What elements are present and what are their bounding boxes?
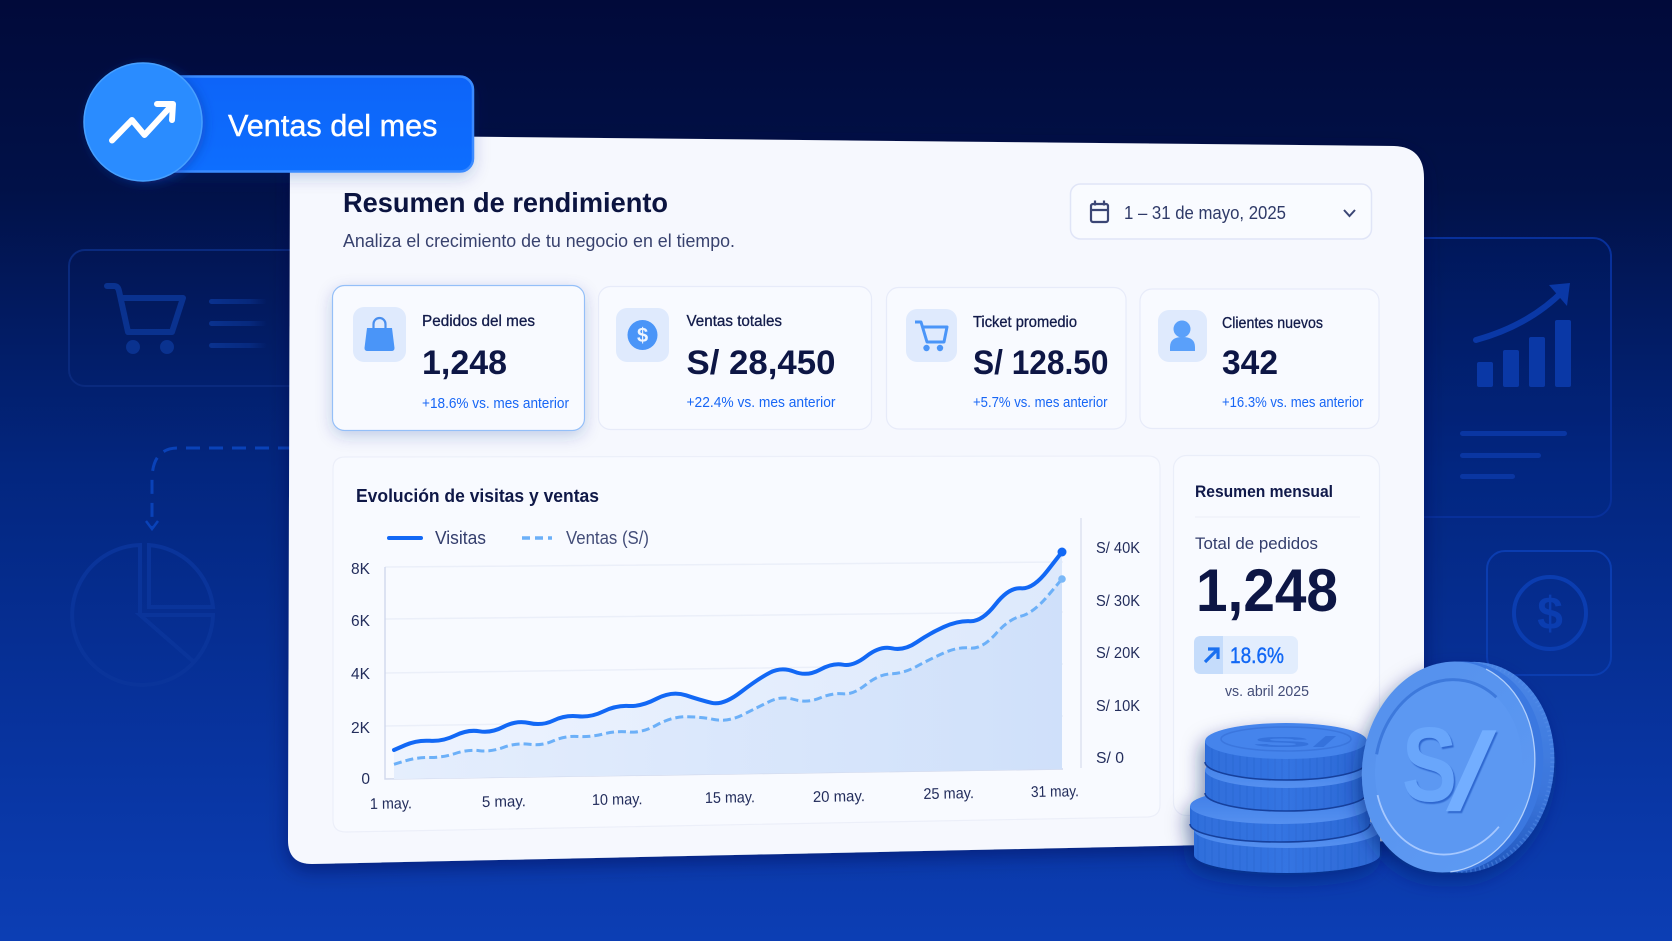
legend: Visitas [435,528,486,548]
x axis labels: 31 may. [1031,783,1079,801]
KPI card: clientes nuevos [1140,289,1379,428]
y axis left labels: 2K [351,720,371,737]
icon: shopping bag [353,307,406,362]
x axis labels [370,783,1079,813]
arrow: dashed connector to pie chart [146,448,292,529]
growth badge: 18.6% [1230,643,1284,668]
series: visitas line [394,548,1066,750]
y axis right labels: S/ 40K [1096,540,1141,557]
badge: ventas del mes [84,63,473,181]
large coin [1345,646,1571,888]
y axis left labels: 0 [361,771,370,788]
x axis labels: 1 may. [370,795,412,813]
legend: Ventas (S/) [566,528,649,548]
coin 3 [1190,788,1370,842]
coin symbol [1402,706,1497,833]
KPI card: pedidos del mes: 1,248 [422,344,507,382]
heading: Resumen de rendimiento [343,187,668,218]
background panel: shopping cart [69,250,369,386]
KPI card: ticket promedio: Ticket promedio [973,314,1077,331]
y axis left labels: 8K [351,561,371,578]
y axis left labels: 4K [351,666,371,683]
coin 1: S/ [1252,733,1338,750]
KPI card: ticket promedio: S/ 128.50 [973,344,1108,382]
icon: dollar coin [616,308,669,362]
y axis right labels [1096,540,1141,767]
icon: cart [906,309,957,362]
series: ventas dashed line [394,575,1066,764]
KPI card: ventas totales [598,286,872,430]
growth badge [1194,636,1298,674]
panel: resumen mensual: vs. abril 2025 [1225,683,1309,700]
y axis right labels: S/ 0 [1096,750,1124,767]
icon: dollar coin: $ [637,325,648,347]
date selector [1070,184,1372,239]
y axis left labels: 6K [351,613,371,630]
KPI card: pedidos del mes: +18.6% vs. mes anterior [422,396,569,412]
x axis labels: 5 may. [482,793,526,811]
text lines [1460,431,1567,479]
KPI card: clientes nuevos: Clientes nuevos [1222,315,1323,332]
KPI card: ventas totales: Ventas totales [686,313,782,330]
grid and axes [385,518,1081,779]
subheading: Analiza el crecimiento de tu negocio en el tiempo. [343,231,735,251]
coin stack [1190,723,1380,873]
coin 2 [1205,752,1367,811]
icon: trend arrow in circle [84,63,202,181]
chart title: Evolución de visitas y ventas [356,486,599,506]
area under the curve [394,552,1062,779]
coin face [1345,648,1552,886]
x axis labels: 10 may. [592,791,643,809]
y axis right labels: S/ 30K [1096,593,1141,610]
panel: resumen mensual [1174,456,1380,816]
panel: resumen mensual: 1,248 [1196,557,1338,624]
KPI card: ticket promedio: +5.7% vs. mes anterior [973,395,1108,411]
y axis right labels: S/ 20K [1096,645,1141,662]
KPI card: ventas totales: S/ 28,450 [686,344,836,382]
icon: growth arrow [1476,283,1570,340]
date selector: 1 – 31 de mayo, 2025 [1124,203,1286,223]
x axis labels: 20 may. [813,788,865,806]
coin 1 [1205,723,1367,780]
x axis labels: 15 may. [705,789,755,807]
KPI card: ventas totales: +22.4% vs. mes anterior [686,395,836,411]
icon: person [1158,310,1207,362]
KPI card: pedidos del mes [332,286,584,430]
background panel: dollar: $ [1537,587,1563,639]
KPI card: ticket promedio [886,288,1126,429]
KPI card: clientes nuevos: 342 [1222,344,1278,382]
background panel: dollar [1487,551,1611,675]
icon: calendar [1091,200,1108,222]
coin symbol: / [1446,710,1497,833]
legend [389,528,649,548]
y axis left labels [351,561,371,788]
KPI card: pedidos del mes: Pedidos del mes [422,313,535,330]
KPI card: clientes nuevos: +16.3% vs. mes anterior [1222,395,1364,411]
icon: chevron [1344,210,1355,216]
x axis labels: 25 may. [923,785,974,803]
panel: main dashboard card [288,135,1424,864]
background panel: growth chart [1380,238,1611,517]
coin symbol: S [1402,706,1457,824]
coin edge [1354,646,1571,888]
panel: line chart [333,456,1160,832]
coin 4 [1194,812,1380,873]
y axis right labels: S/ 10K [1096,698,1141,715]
badge: ventas del mes: Ventas del mes [228,108,438,143]
icon: background pie chart [72,545,213,685]
panel: resumen mensual: Total de pedidos [1195,534,1318,553]
icon: bars [1477,320,1571,387]
panel: resumen mensual: Resumen mensual [1195,482,1333,501]
